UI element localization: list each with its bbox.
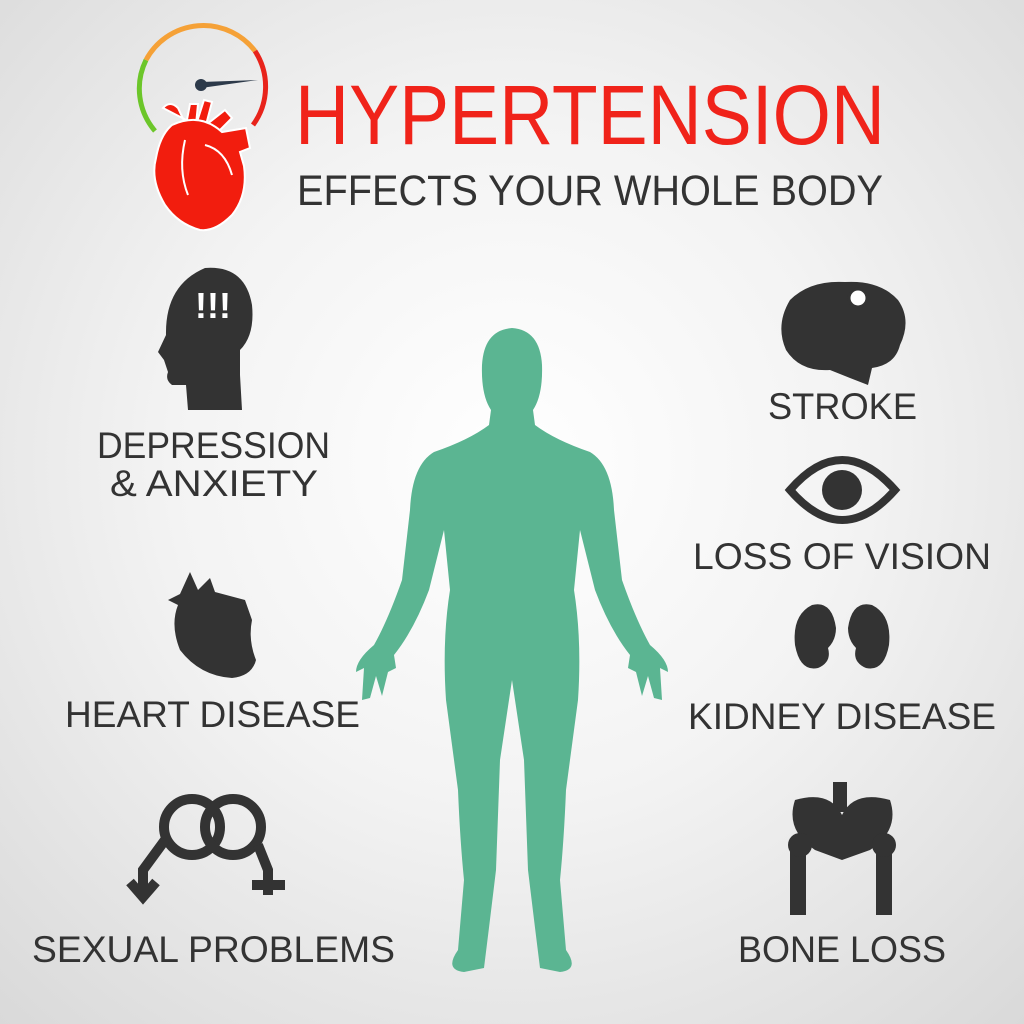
panel: loss of vision	[693, 460, 991, 577]
panel: loss of vision: LOSS OF VISION	[693, 536, 991, 577]
icon: head	[158, 268, 252, 410]
panel: depression & anxiety	[97, 268, 330, 504]
icon: eye	[790, 460, 895, 520]
panel: stroke	[768, 282, 917, 427]
panel: kidney disease: KIDNEY DISEASE	[688, 696, 996, 737]
icon: gauge with heart	[139, 26, 266, 230]
icon: gender symbols	[130, 799, 285, 897]
panel: kidney disease	[688, 604, 996, 737]
icon: kidneys	[795, 604, 836, 669]
panel: heart disease	[65, 572, 360, 735]
panel: sexual problems: SEXUAL PROBLEMS	[32, 929, 395, 970]
icon: heart	[168, 572, 256, 678]
panel: depression & anxiety: !!!	[195, 285, 231, 326]
panel: bone loss	[738, 782, 946, 970]
icon: brain	[781, 282, 906, 385]
panel: heart disease: HEART DISEASE	[65, 694, 360, 735]
panel: sexual problems	[32, 799, 395, 970]
icon: pelvis	[788, 782, 896, 915]
panel: depression & anxiety: DEPRESSION	[97, 425, 330, 466]
panel: depression & anxiety: & ANXIETY	[110, 463, 318, 504]
subtitle: EFFECTS YOUR WHOLE BODY	[297, 167, 883, 215]
title: HYPERTENSION	[295, 68, 885, 162]
body silhouette	[356, 328, 668, 972]
panel: bone loss: BONE LOSS	[738, 929, 946, 970]
panel: stroke: STROKE	[768, 386, 917, 427]
